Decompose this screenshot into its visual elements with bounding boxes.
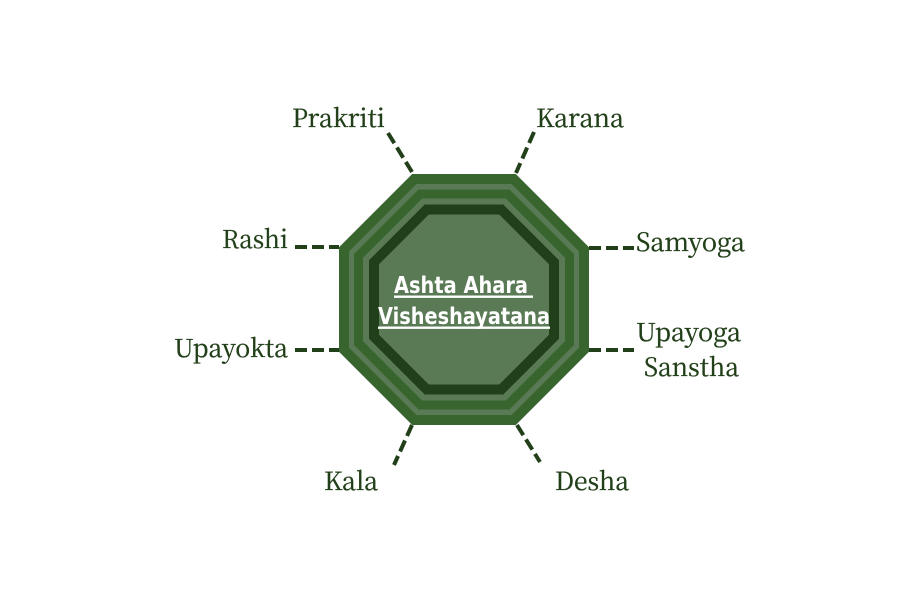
connector: Desha [517,425,540,462]
label: Upayoga Sanstha [636,313,741,384]
connector: Upayokta [295,348,339,352]
connector: Samyoga [589,246,634,250]
connector: Upayoga Sanstha [589,348,634,352]
connector: Prakriti [388,133,412,172]
connector: Karana [516,132,534,173]
label: Upayoga Sanstha: Upayoga [636,313,741,349]
label: Upayoga Sanstha: Sanstha [644,348,739,384]
label: Upayokta: Upayokta [174,329,288,365]
center title: Ashta Ahara [394,273,528,299]
center title [378,273,550,330]
label: Karana: Karana [536,99,624,135]
connector: Kala [394,425,412,465]
label: Desha: Desha [555,462,629,498]
label: Rashi: Rashi [222,220,288,256]
central octagon [339,174,589,425]
label: Samyoga: Samyoga [636,223,745,259]
center title: Visheshayatana [378,304,550,330]
connector: Rashi [295,245,339,249]
label: Kala: Kala [324,462,378,498]
label: Prakriti: Prakriti [292,99,385,135]
